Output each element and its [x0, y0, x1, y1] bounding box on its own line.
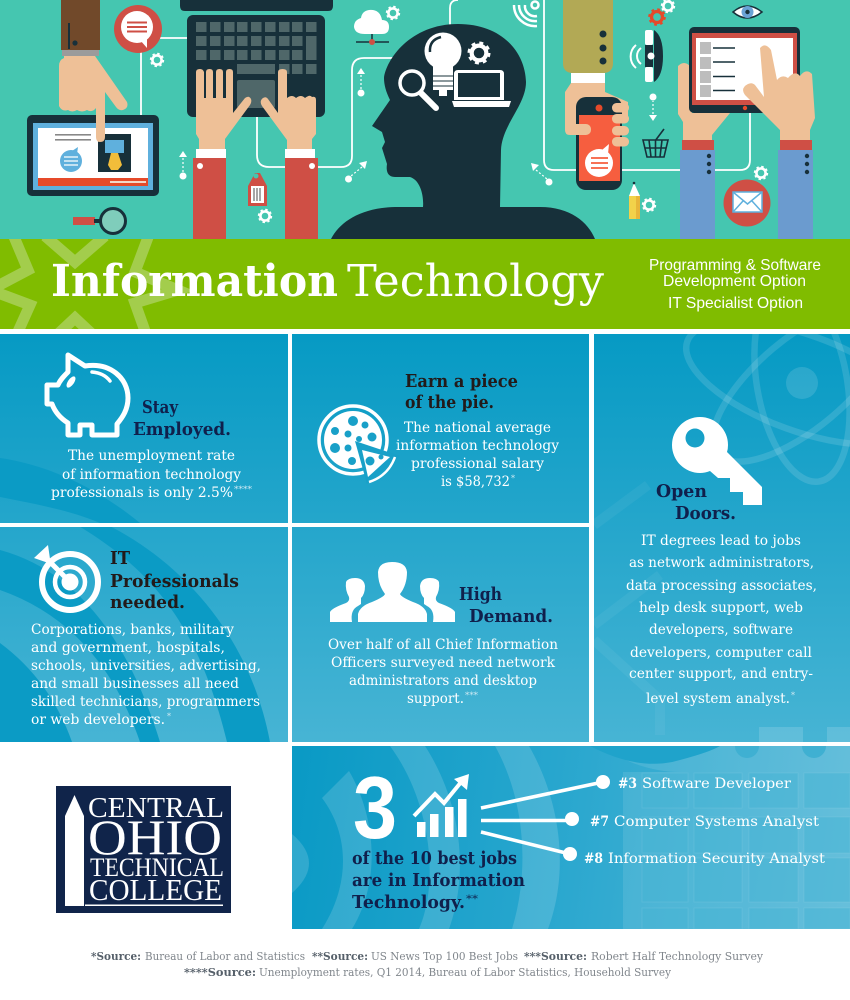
heading: Open [656, 481, 707, 502]
icon: pencil [629, 182, 640, 219]
body text: The national average [404, 420, 551, 436]
body text: information technology [396, 438, 559, 454]
heading [133, 397, 231, 440]
icon: basket [643, 129, 668, 157]
body text: The unemployment rate [68, 448, 235, 464]
head icons [400, 32, 511, 108]
heading: Employed. [133, 419, 231, 440]
body text: and government, hospitals, [31, 640, 225, 656]
body text: center support, and entry- [629, 666, 813, 682]
heading: Demand. [469, 606, 553, 627]
job ranks: Information Security Analyst [608, 851, 826, 867]
panel: IT professionals needed [0, 515, 288, 742]
hand pointing at tablet [61, 0, 100, 56]
program options [649, 257, 821, 312]
body text: Over half of all Chief Information [328, 637, 558, 653]
body text: Corporations, banks, military [31, 622, 234, 638]
sources footer: Robert Half Technology Survey [591, 949, 763, 963]
tablet left [27, 115, 159, 196]
heading [656, 481, 736, 524]
background atom and arrows [594, 334, 850, 742]
banner star decoration [0, 239, 190, 329]
icon: key [672, 417, 762, 505]
small arrows [179, 68, 657, 186]
sources footer [91, 949, 763, 979]
heading: IT [110, 548, 131, 569]
heading: Earn a piece [405, 371, 518, 392]
body text [31, 622, 261, 728]
panel: stay employed [0, 334, 288, 523]
title text: Technology [347, 256, 604, 307]
body text: and small businesses all need [31, 676, 239, 692]
pointing hand skin [59, 56, 128, 142]
program options: Development Option [663, 273, 806, 290]
job ranks: #3 [618, 776, 637, 792]
body text [396, 420, 559, 490]
title banner [0, 239, 850, 329]
heading: needed. [110, 592, 185, 613]
chat bubble icon [114, 5, 162, 53]
title text: Information [51, 256, 338, 307]
hand holding phone [563, 0, 629, 190]
program options: IT Specialist Option [668, 295, 803, 312]
heading: Stay [142, 397, 178, 418]
heading: ** [466, 894, 478, 905]
program options: Programming & Software [649, 257, 821, 274]
body text: * [167, 712, 171, 721]
job ranks: Software Developer [642, 776, 792, 792]
heading: High [459, 584, 502, 605]
title text [51, 256, 604, 307]
body text: * [791, 691, 795, 700]
heading: Doors. [675, 503, 736, 524]
heading [110, 548, 239, 613]
heading [352, 848, 525, 913]
body text: IT degrees lead to jobs [641, 533, 801, 549]
logo: Central Ohio Technical College: TECHNICAL [90, 853, 224, 882]
sources footer: US News Top 100 Best Jobs [371, 949, 518, 963]
body text: of information technology [62, 467, 241, 483]
header illustration [0, 0, 850, 239]
icon: gears left [151, 0, 767, 222]
job ranks: #8 [584, 851, 603, 867]
panel: high demand [292, 527, 589, 742]
icon: pizza [319, 406, 400, 484]
body text: data processing associates, [626, 578, 817, 594]
panel: best jobs [292, 734, 850, 929]
icon: envelope [724, 180, 770, 226]
job ranks: #7 [590, 814, 609, 830]
job ranks: Computer Systems Analyst [614, 814, 820, 830]
icon: magnifier [73, 208, 126, 234]
icon: red gear [649, 9, 665, 25]
icon: piggy bank [47, 355, 128, 435]
icon: telephone [631, 30, 663, 82]
background rings [0, 515, 270, 742]
heading: of the pie. [405, 392, 494, 413]
body text: skilled technicians, programmers [31, 694, 260, 710]
heading: Professionals [110, 571, 239, 592]
body text: developers, computer call [630, 645, 812, 661]
heading: Technology. [352, 892, 465, 913]
body text: schools, universities, advertising, [31, 658, 261, 674]
body text [328, 637, 558, 707]
heading [459, 584, 553, 627]
job ranks [584, 776, 826, 867]
body text: is $58,732 [441, 474, 510, 490]
logo: Central Ohio Technical College: COLLEGE [89, 872, 222, 907]
body text: support. [407, 691, 464, 707]
logo: Central Ohio Technical College [56, 786, 231, 913]
tablet right with hands [678, 27, 815, 239]
heading [405, 371, 518, 413]
body text: **** [234, 485, 252, 494]
head silhouette [331, 24, 595, 239]
body text: as network administrators, [629, 555, 814, 571]
sources footer: ****Source: [184, 965, 256, 979]
background shapes [292, 734, 850, 929]
panel: earn a piece of the pie [292, 334, 589, 523]
body text: professional salary [411, 456, 544, 472]
typing hands [193, 69, 318, 239]
heading: of the 10 best jobs [352, 848, 517, 869]
icon: people [330, 562, 455, 622]
body text: or web developers. [31, 712, 165, 728]
heading: are in Information [352, 870, 525, 891]
icon: eye [733, 6, 762, 18]
body text: help desk support, web [639, 600, 803, 616]
laptop keyboard [180, 0, 333, 117]
body text: developers, software [649, 622, 793, 638]
body text: Officers surveyed need network [331, 655, 556, 671]
icon: tag [248, 173, 267, 206]
body text: level system analyst. [646, 691, 790, 707]
logo: Central Ohio Technical College: CENTRAL [88, 792, 224, 824]
body text: professionals is only 2.5% [51, 485, 233, 501]
connector lines [141, 0, 750, 170]
connector lines [481, 775, 610, 861]
sources footer: **Source: [312, 949, 368, 963]
sources footer: *Source: [91, 949, 141, 963]
body text [51, 448, 252, 501]
body text: *** [465, 691, 478, 700]
icon: wifi top [514, 2, 538, 26]
sources footer: ***Source: [524, 949, 587, 963]
icon: cloud network [354, 10, 389, 45]
icon: growth chart [414, 774, 469, 837]
body text [626, 533, 817, 707]
sources footer: Bureau of Labor and Statistics [145, 949, 305, 963]
body text: administrators and desktop [349, 673, 537, 689]
panel: open doors [594, 334, 850, 742]
big number 3: 3 [353, 758, 397, 857]
sources footer: Unemployment rates, Q1 2014, Bureau of Labor Statistics, Household Survey [259, 965, 671, 979]
body text: * [511, 474, 515, 483]
logo: Central Ohio Technical College: OHIO [88, 809, 222, 865]
icon: target [34, 545, 98, 610]
